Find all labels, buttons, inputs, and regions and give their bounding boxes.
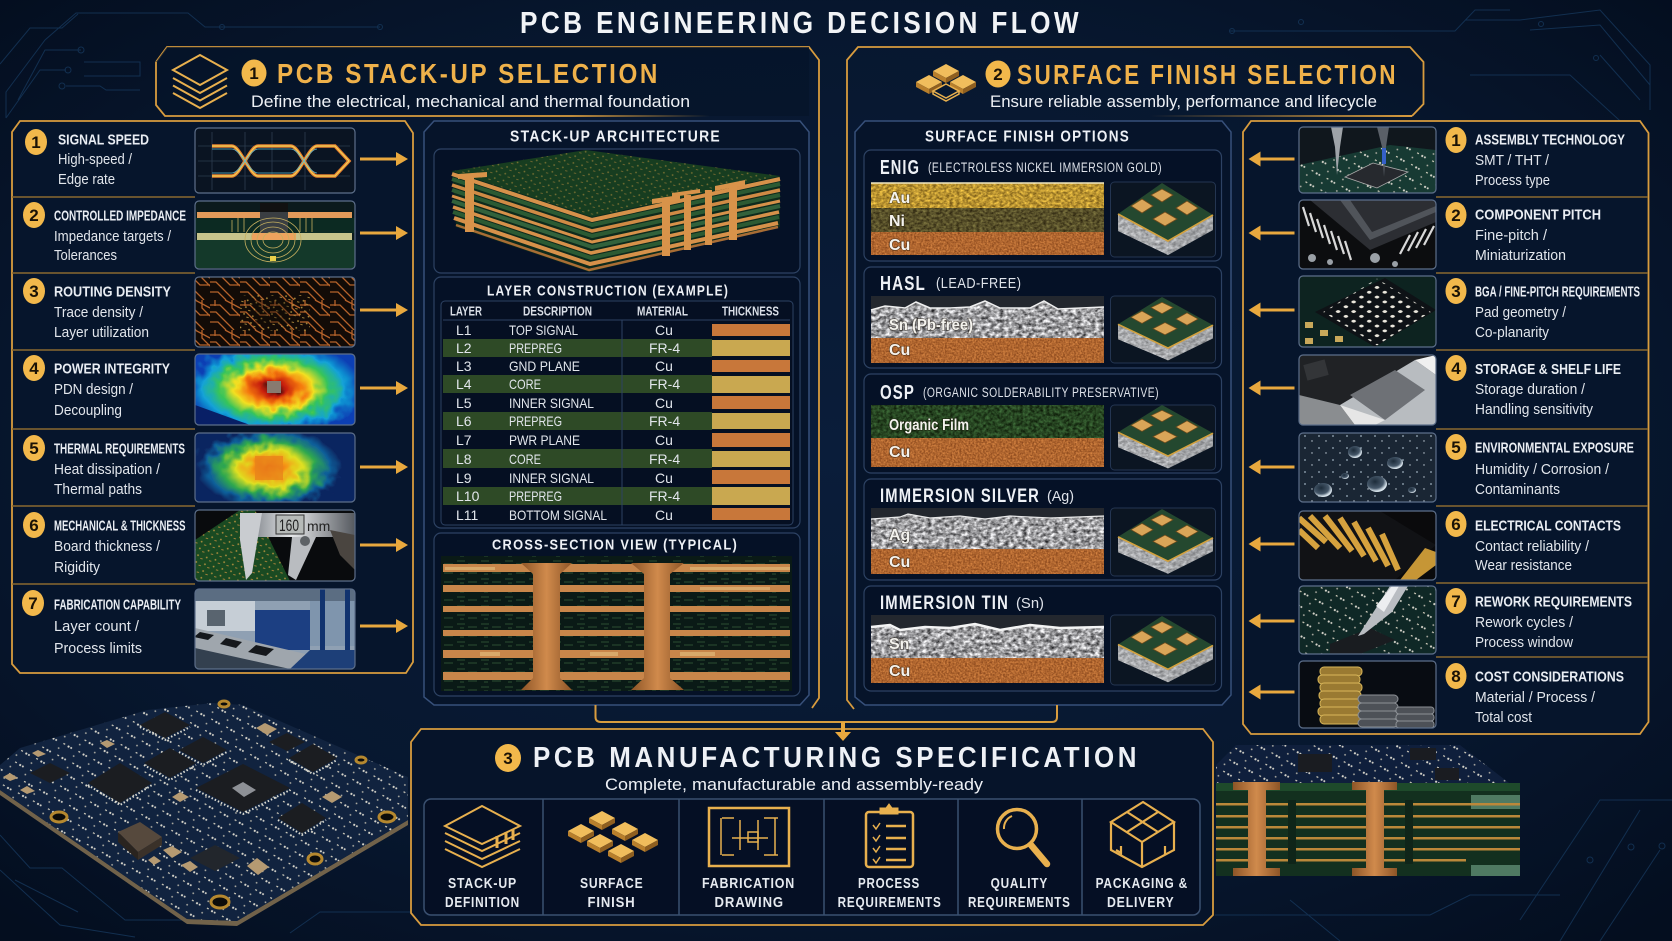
arrow bbox=[1248, 226, 1294, 240]
row text: High-speed / bbox=[58, 151, 133, 168]
row text: POWER INTEGRITY bbox=[54, 360, 170, 378]
row text bbox=[1475, 668, 1624, 726]
label: REQUIREMENTS bbox=[968, 894, 1071, 911]
row text: ELECTRICAL CONTACTS bbox=[1475, 518, 1621, 534]
arrow bbox=[360, 381, 408, 395]
number badge: 5 bbox=[29, 439, 39, 458]
row text bbox=[54, 360, 170, 419]
number badge bbox=[23, 355, 45, 381]
card: ENIG bbox=[864, 150, 1222, 261]
card: OSP bbox=[864, 374, 1222, 473]
arrow bbox=[1248, 152, 1294, 166]
row text: THERMAL REQUIREMENTS bbox=[54, 440, 185, 458]
silver layers: Ag bbox=[889, 527, 910, 544]
icon: layer stack bbox=[173, 55, 227, 108]
thumbnail border bbox=[1299, 355, 1436, 425]
label: DRAWING bbox=[714, 894, 784, 911]
row: BGA bbox=[1248, 276, 1640, 347]
arrow bbox=[1248, 380, 1294, 396]
number badge bbox=[1446, 511, 1466, 537]
HASL layers: Cu bbox=[889, 342, 910, 359]
subheading: Complete, manufacturable and assembly-ready bbox=[605, 775, 984, 794]
immersion tin title: (Sn) bbox=[1016, 595, 1044, 612]
cross-section image bbox=[441, 556, 792, 691]
row text: Miniaturization bbox=[1475, 247, 1566, 264]
number badge: 5 bbox=[1451, 438, 1461, 457]
table: layers: L10 bbox=[456, 488, 480, 504]
row text: STORAGE & SHELF LIFE bbox=[1475, 361, 1621, 378]
number badge: 6 bbox=[29, 516, 39, 535]
row: storage bbox=[1248, 355, 1621, 425]
table: layers: CORE bbox=[509, 451, 541, 467]
thumbnail: thermal map bbox=[196, 434, 354, 502]
table: layers: Cu bbox=[655, 395, 673, 411]
thumbnail border bbox=[195, 433, 355, 502]
thumbnail: eye diagram bbox=[195, 128, 355, 193]
row text: SMT / THT / bbox=[1475, 152, 1550, 169]
number badge bbox=[1446, 202, 1466, 228]
row: cost bbox=[1248, 661, 1624, 728]
row text bbox=[1475, 361, 1621, 418]
number badge 1 bbox=[242, 60, 266, 86]
panel: PCB manufacturing specification bbox=[411, 729, 1213, 925]
heading: stack-up architecture: STACK-UP ARCHITECTURE bbox=[510, 128, 721, 146]
row text: Fine-pitch / bbox=[1475, 227, 1548, 244]
table: layers: Cu bbox=[655, 470, 673, 486]
row: routing density bbox=[23, 277, 408, 347]
row text: Process window bbox=[1475, 634, 1573, 651]
ENIG layers: Cu bbox=[889, 237, 910, 254]
row text: Thermal paths bbox=[54, 481, 142, 498]
table: layers: GND PLANE bbox=[509, 358, 580, 374]
number badge bbox=[1446, 127, 1466, 153]
table: layers: LAYER bbox=[450, 304, 482, 318]
row text: Contaminants bbox=[1475, 481, 1560, 498]
row text bbox=[1475, 284, 1640, 341]
icon: magnifier bbox=[998, 810, 1047, 864]
row text bbox=[54, 284, 171, 341]
number badge: 1 bbox=[31, 133, 41, 152]
row text: ROUTING DENSITY bbox=[54, 284, 171, 300]
row text: Layer utilization bbox=[54, 324, 149, 341]
table: layers: L3 bbox=[456, 358, 472, 374]
label bbox=[838, 875, 942, 911]
panel: stack-up inputs bbox=[12, 121, 413, 673]
deliverables row bbox=[424, 799, 1200, 915]
arrow bbox=[1248, 460, 1294, 474]
number badge bbox=[23, 278, 45, 304]
card: cross-section view bbox=[434, 533, 800, 696]
row text bbox=[1475, 518, 1621, 574]
table: layers: DESCRIPTION bbox=[523, 304, 592, 318]
thumbnail border bbox=[195, 510, 355, 581]
row text: Board thickness / bbox=[54, 538, 161, 555]
row text: CONTROLLED IMPEDANCE bbox=[54, 208, 186, 224]
item: process requirements bbox=[838, 804, 942, 911]
panel: surface finish inputs bbox=[1243, 121, 1648, 734]
table: layers: FR-4 bbox=[649, 488, 680, 504]
OSP layers: Cu bbox=[889, 444, 910, 461]
connector into specification bbox=[596, 705, 1057, 741]
3D layered board bbox=[452, 150, 780, 272]
label bbox=[968, 875, 1071, 911]
panel: surface finish options bbox=[855, 121, 1231, 705]
row text bbox=[54, 440, 185, 498]
row text: Heat dissipation / bbox=[54, 461, 161, 478]
number badge bbox=[23, 435, 45, 461]
table: layers: BOTTOM SIGNAL bbox=[509, 507, 607, 523]
panel: surface finish header bbox=[916, 59, 1412, 117]
silver layers: Cu bbox=[889, 554, 910, 571]
panel: stack-up selection frame bbox=[156, 47, 819, 708]
row text bbox=[58, 132, 149, 188]
ENIG title: ENIG bbox=[880, 157, 920, 179]
number badge bbox=[1446, 434, 1466, 460]
ENIG title: (ELECTROLESS NICKEL IMMERSION GOLD) bbox=[928, 160, 1162, 175]
arrow bbox=[360, 152, 408, 166]
table: layers: CORE bbox=[509, 376, 541, 392]
thumbnail: water droplets bbox=[1299, 433, 1436, 502]
row text: Layer count / bbox=[54, 618, 140, 635]
thumbnail border bbox=[1299, 511, 1436, 580]
thumbnail: BGA bbox=[1299, 276, 1436, 347]
heading: surface finish options: SURFACE FINISH OPTIONS bbox=[925, 128, 1130, 146]
table: layers: Cu bbox=[655, 358, 673, 374]
number badge: 6 bbox=[1451, 515, 1461, 534]
number badge: 2 bbox=[1451, 206, 1461, 225]
card: layer construction bbox=[434, 277, 800, 528]
table: layers: L11 bbox=[456, 507, 479, 523]
number badge bbox=[1446, 355, 1466, 381]
thumbnail: soldering iron bbox=[1299, 586, 1436, 654]
row text: Humidity / Corrosion / bbox=[1475, 461, 1610, 478]
row text bbox=[54, 596, 181, 657]
row text: COST CONSIDERATIONS bbox=[1475, 668, 1624, 686]
row: component pitch bbox=[1248, 200, 1601, 269]
number badge: 8 bbox=[1451, 667, 1461, 686]
thumbnail: QFP chip bbox=[1299, 200, 1436, 269]
row text: MECHANICAL & THICKNESS bbox=[54, 518, 186, 534]
number badge: 3 bbox=[1451, 282, 1461, 301]
table: layers: Cu bbox=[655, 507, 673, 523]
number badge bbox=[23, 512, 45, 538]
HASL layers bbox=[871, 296, 1104, 363]
row: assembly technology bbox=[1248, 127, 1625, 193]
row text: Total cost bbox=[1475, 709, 1533, 726]
tin layers: Cu bbox=[889, 663, 910, 680]
row: mechanical and thickness bbox=[23, 510, 408, 581]
table: layers: L7 bbox=[456, 432, 472, 448]
immersion silver title: IMMERSION SILVER bbox=[880, 486, 1040, 507]
row text: Rigidity bbox=[54, 559, 100, 576]
row text: ASSEMBLY TECHNOLOGY bbox=[1475, 132, 1625, 148]
HASL title: HASL bbox=[880, 273, 926, 295]
table: layers: Cu bbox=[655, 432, 673, 448]
table: layers: FR-4 bbox=[649, 413, 680, 429]
number badge: 4 bbox=[1451, 359, 1461, 378]
table: layers: L6 bbox=[456, 413, 472, 429]
table: layers: PWR PLANE bbox=[509, 432, 580, 448]
row text bbox=[1475, 440, 1634, 498]
thumbnail border bbox=[1299, 661, 1436, 728]
HASL title bbox=[880, 273, 1022, 295]
arrow bbox=[1248, 614, 1294, 628]
row text: Wear resistance bbox=[1475, 557, 1572, 574]
arrow bbox=[1248, 536, 1294, 552]
ENIG board thumbnail bbox=[1110, 182, 1216, 257]
heading: cross-section: CROSS-SECTION VIEW (TYPICAL) bbox=[492, 536, 738, 554]
label: SURFACE bbox=[580, 875, 644, 892]
row text: Storage duration / bbox=[1475, 381, 1586, 398]
thumbnail: traces bbox=[195, 277, 355, 347]
subheading: Ensure reliable assembly, performance and lifecycle bbox=[990, 92, 1377, 111]
tin layers bbox=[871, 615, 1104, 683]
label: FABRICATION bbox=[702, 875, 795, 892]
thumbnail: caliper: 160 bbox=[279, 516, 299, 535]
label: DELIVERY bbox=[1107, 894, 1174, 911]
panel: stack-up details bbox=[424, 121, 809, 705]
item: stack-up definition bbox=[445, 806, 520, 911]
table: layers: PREPREG bbox=[509, 488, 562, 504]
silver layers bbox=[871, 508, 1104, 574]
card: immersion tin bbox=[864, 586, 1222, 691]
table: layers: L9 bbox=[456, 470, 472, 486]
label: PACKAGING & bbox=[1096, 875, 1188, 892]
table: layers: PREPREG bbox=[509, 340, 562, 356]
ENIG layers: Ni bbox=[889, 213, 905, 230]
inductor and passives bbox=[118, 822, 162, 852]
row text: SIGNAL SPEED bbox=[58, 132, 149, 148]
row text bbox=[54, 518, 186, 576]
label bbox=[1096, 875, 1188, 911]
icon: drawing bbox=[709, 808, 789, 866]
row text: Decoupling bbox=[54, 402, 122, 419]
label bbox=[445, 875, 520, 911]
row: controlled impedance bbox=[23, 201, 408, 269]
card: immersion silver bbox=[864, 479, 1222, 580]
row text: Edge rate bbox=[58, 171, 115, 188]
table: layers: INNER SIGNAL bbox=[509, 395, 594, 411]
item: fabrication drawing bbox=[702, 808, 795, 911]
row text bbox=[1475, 132, 1625, 189]
arrow bbox=[360, 460, 408, 474]
row text: Material / Process / bbox=[1475, 689, 1596, 706]
label: REQUIREMENTS bbox=[838, 894, 942, 911]
row text bbox=[54, 208, 186, 264]
table: layers bbox=[441, 301, 793, 525]
table: layers: PREPREG bbox=[509, 413, 562, 429]
subheading: Define the electrical, mechanical and thermal foundation bbox=[251, 92, 690, 111]
arrow bbox=[360, 303, 408, 317]
thumbnail: caliper bbox=[195, 510, 355, 581]
table: layers: L2 bbox=[456, 340, 472, 356]
number badge bbox=[1446, 588, 1466, 614]
thumbnail border bbox=[195, 128, 355, 193]
silver board thumbnail bbox=[1110, 508, 1216, 576]
label: QUALITY bbox=[991, 875, 1048, 892]
thumbnail border bbox=[1299, 276, 1436, 347]
thumbnail: coins bbox=[1299, 661, 1436, 728]
label: FINISH bbox=[588, 894, 636, 911]
heading: stack-up: PCB STACK-UP SELECTION bbox=[277, 58, 660, 89]
thumbnail: caliper: mm bbox=[307, 518, 330, 534]
row: thermal requirements bbox=[23, 432, 408, 503]
number badge 1: 1 bbox=[249, 64, 259, 83]
thumbnail border bbox=[1299, 586, 1436, 654]
row text: Rework cycles / bbox=[1475, 614, 1574, 631]
table: layers: TOP SIGNAL bbox=[509, 322, 578, 338]
icon: box bbox=[1111, 802, 1174, 867]
label: PROCESS bbox=[858, 875, 920, 892]
label: STACK-UP bbox=[448, 875, 517, 892]
row: electrical contacts bbox=[1248, 511, 1621, 580]
row text: Process type bbox=[1475, 172, 1550, 189]
number badge: 3 bbox=[29, 282, 39, 301]
table: layers: L4 bbox=[456, 376, 472, 392]
OSP layers: Organic Film bbox=[889, 417, 969, 434]
thumbnail border bbox=[1299, 127, 1436, 193]
table: layers: INNER SIGNAL bbox=[509, 470, 594, 486]
number badge: 2 bbox=[29, 206, 39, 225]
label bbox=[702, 875, 795, 911]
number badge: 7 bbox=[1451, 592, 1461, 611]
OSP board thumbnail bbox=[1110, 405, 1216, 470]
number badge 2: 2 bbox=[993, 65, 1003, 84]
row: power integrity bbox=[23, 353, 408, 426]
table: layers: Cu bbox=[655, 322, 673, 338]
HASL title: (LEAD-FREE) bbox=[936, 275, 1022, 292]
ENIG title bbox=[880, 157, 1162, 179]
thumbnail: gold fingers bbox=[1299, 511, 1436, 580]
OSP title: OSP bbox=[880, 382, 915, 404]
thumbnail border bbox=[195, 201, 355, 269]
row text: REWORK REQUIREMENTS bbox=[1475, 594, 1632, 610]
chips bbox=[30, 712, 337, 871]
immersion tin title: IMMERSION TIN bbox=[880, 593, 1009, 614]
arrow bbox=[1248, 302, 1294, 318]
icon: clipboard bbox=[866, 804, 913, 867]
thumbnail: PDN heat map bbox=[196, 354, 354, 424]
label: DEFINITION bbox=[445, 894, 520, 911]
table: layers: L5 bbox=[456, 395, 472, 411]
title: PCB ENGINEERING DECISION FLOW bbox=[520, 5, 1082, 40]
arrow bbox=[1248, 684, 1294, 700]
card: 3D stack-up bbox=[434, 149, 800, 273]
thumbnail: factory bbox=[194, 589, 355, 669]
thumbnail: pick and place bbox=[1299, 127, 1436, 193]
row: fabrication capability bbox=[22, 589, 408, 669]
panel: stack-up header bbox=[156, 47, 809, 116]
icon: finish cubes bbox=[916, 64, 976, 101]
row text: PDN design / bbox=[54, 381, 134, 398]
row text: Process limits bbox=[54, 640, 142, 657]
heading: specification: PCB MANUFACTURING SPECIFICATION bbox=[533, 742, 1140, 774]
HASL layers: Sn (Pb-free) bbox=[889, 317, 973, 334]
table: layers: FR-4 bbox=[649, 451, 680, 467]
table: layers: MATERIAL bbox=[637, 304, 688, 318]
thumbnail border bbox=[1299, 200, 1436, 269]
item: surface finish bbox=[568, 811, 658, 911]
OSP title bbox=[880, 382, 1159, 404]
OSP layers bbox=[871, 405, 1104, 467]
heading: surface finish: SURFACE FINISH SELECTION bbox=[1017, 59, 1398, 90]
thumbnail: impedance cross-section bbox=[195, 201, 355, 269]
row text: Pad geometry / bbox=[1475, 304, 1567, 321]
number badge 3: 3 bbox=[503, 749, 513, 768]
row text bbox=[1475, 206, 1601, 264]
thumbnail: moisture barrier bag bbox=[1299, 355, 1436, 425]
thumbnail border bbox=[195, 354, 355, 425]
tin board thumbnail bbox=[1110, 615, 1216, 685]
number badge bbox=[22, 590, 44, 616]
number badge: 4 bbox=[29, 359, 39, 378]
row text: Co-planarity bbox=[1475, 324, 1549, 341]
HASL board thumbnail bbox=[1110, 296, 1216, 363]
arrow bbox=[360, 619, 408, 633]
table: layers: FR-4 bbox=[649, 340, 680, 356]
number badge bbox=[23, 202, 45, 228]
number badge 3 bbox=[495, 744, 521, 772]
OSP title: (ORGANIC SOLDERABILITY PRESERVATIVE) bbox=[923, 385, 1159, 400]
stacked PCB render bottom right bbox=[1216, 745, 1520, 876]
icon: stack-up bbox=[445, 806, 520, 867]
row text: Impedance targets / bbox=[54, 228, 172, 245]
number badge: 7 bbox=[28, 594, 38, 613]
number badge bbox=[25, 129, 47, 155]
row text: FABRICATION CAPABILITY bbox=[54, 596, 181, 614]
row: environmental bbox=[1248, 433, 1634, 502]
row text bbox=[1475, 594, 1632, 651]
number badge bbox=[1446, 278, 1466, 304]
row text: Trace density / bbox=[54, 304, 144, 321]
item: packaging and delivery bbox=[1096, 802, 1188, 911]
row text: Handling sensitivity bbox=[1475, 401, 1593, 418]
arrow bbox=[360, 538, 408, 552]
number badge bbox=[1446, 663, 1466, 689]
heading: layer construction: LAYER CONSTRUCTION (EXAMPLE) bbox=[487, 282, 729, 300]
table: layers: FR-4 bbox=[649, 376, 680, 392]
number badge: 1 bbox=[1451, 131, 1461, 150]
immersion silver title: (Ag) bbox=[1047, 488, 1074, 505]
row text: Tolerances bbox=[54, 247, 117, 264]
row text: Contact reliability / bbox=[1475, 538, 1590, 555]
ENIG layers bbox=[871, 183, 1104, 255]
table: layers: L8 bbox=[456, 451, 472, 467]
PCB board render bottom left bbox=[0, 701, 408, 926]
tin layers: Sn bbox=[889, 636, 909, 653]
card: HASL bbox=[864, 267, 1222, 368]
panel: surface finish frame bbox=[847, 47, 1424, 709]
label bbox=[580, 875, 644, 911]
ENIG layers: Au bbox=[889, 190, 910, 207]
thumbnail border bbox=[1299, 433, 1436, 502]
thumbnail border bbox=[195, 589, 355, 669]
table: layers: L1 bbox=[456, 322, 472, 338]
number badge 2 bbox=[986, 60, 1010, 88]
thumbnail border bbox=[195, 277, 355, 347]
icon: finish pads bbox=[568, 811, 658, 863]
arrow bbox=[360, 226, 408, 240]
row: rework bbox=[1248, 586, 1632, 654]
item: quality requirements bbox=[968, 810, 1071, 911]
row text: COMPONENT PITCH bbox=[1475, 206, 1601, 224]
table: layers: THICKNESS bbox=[722, 304, 779, 318]
row: signal speed bbox=[25, 128, 408, 193]
